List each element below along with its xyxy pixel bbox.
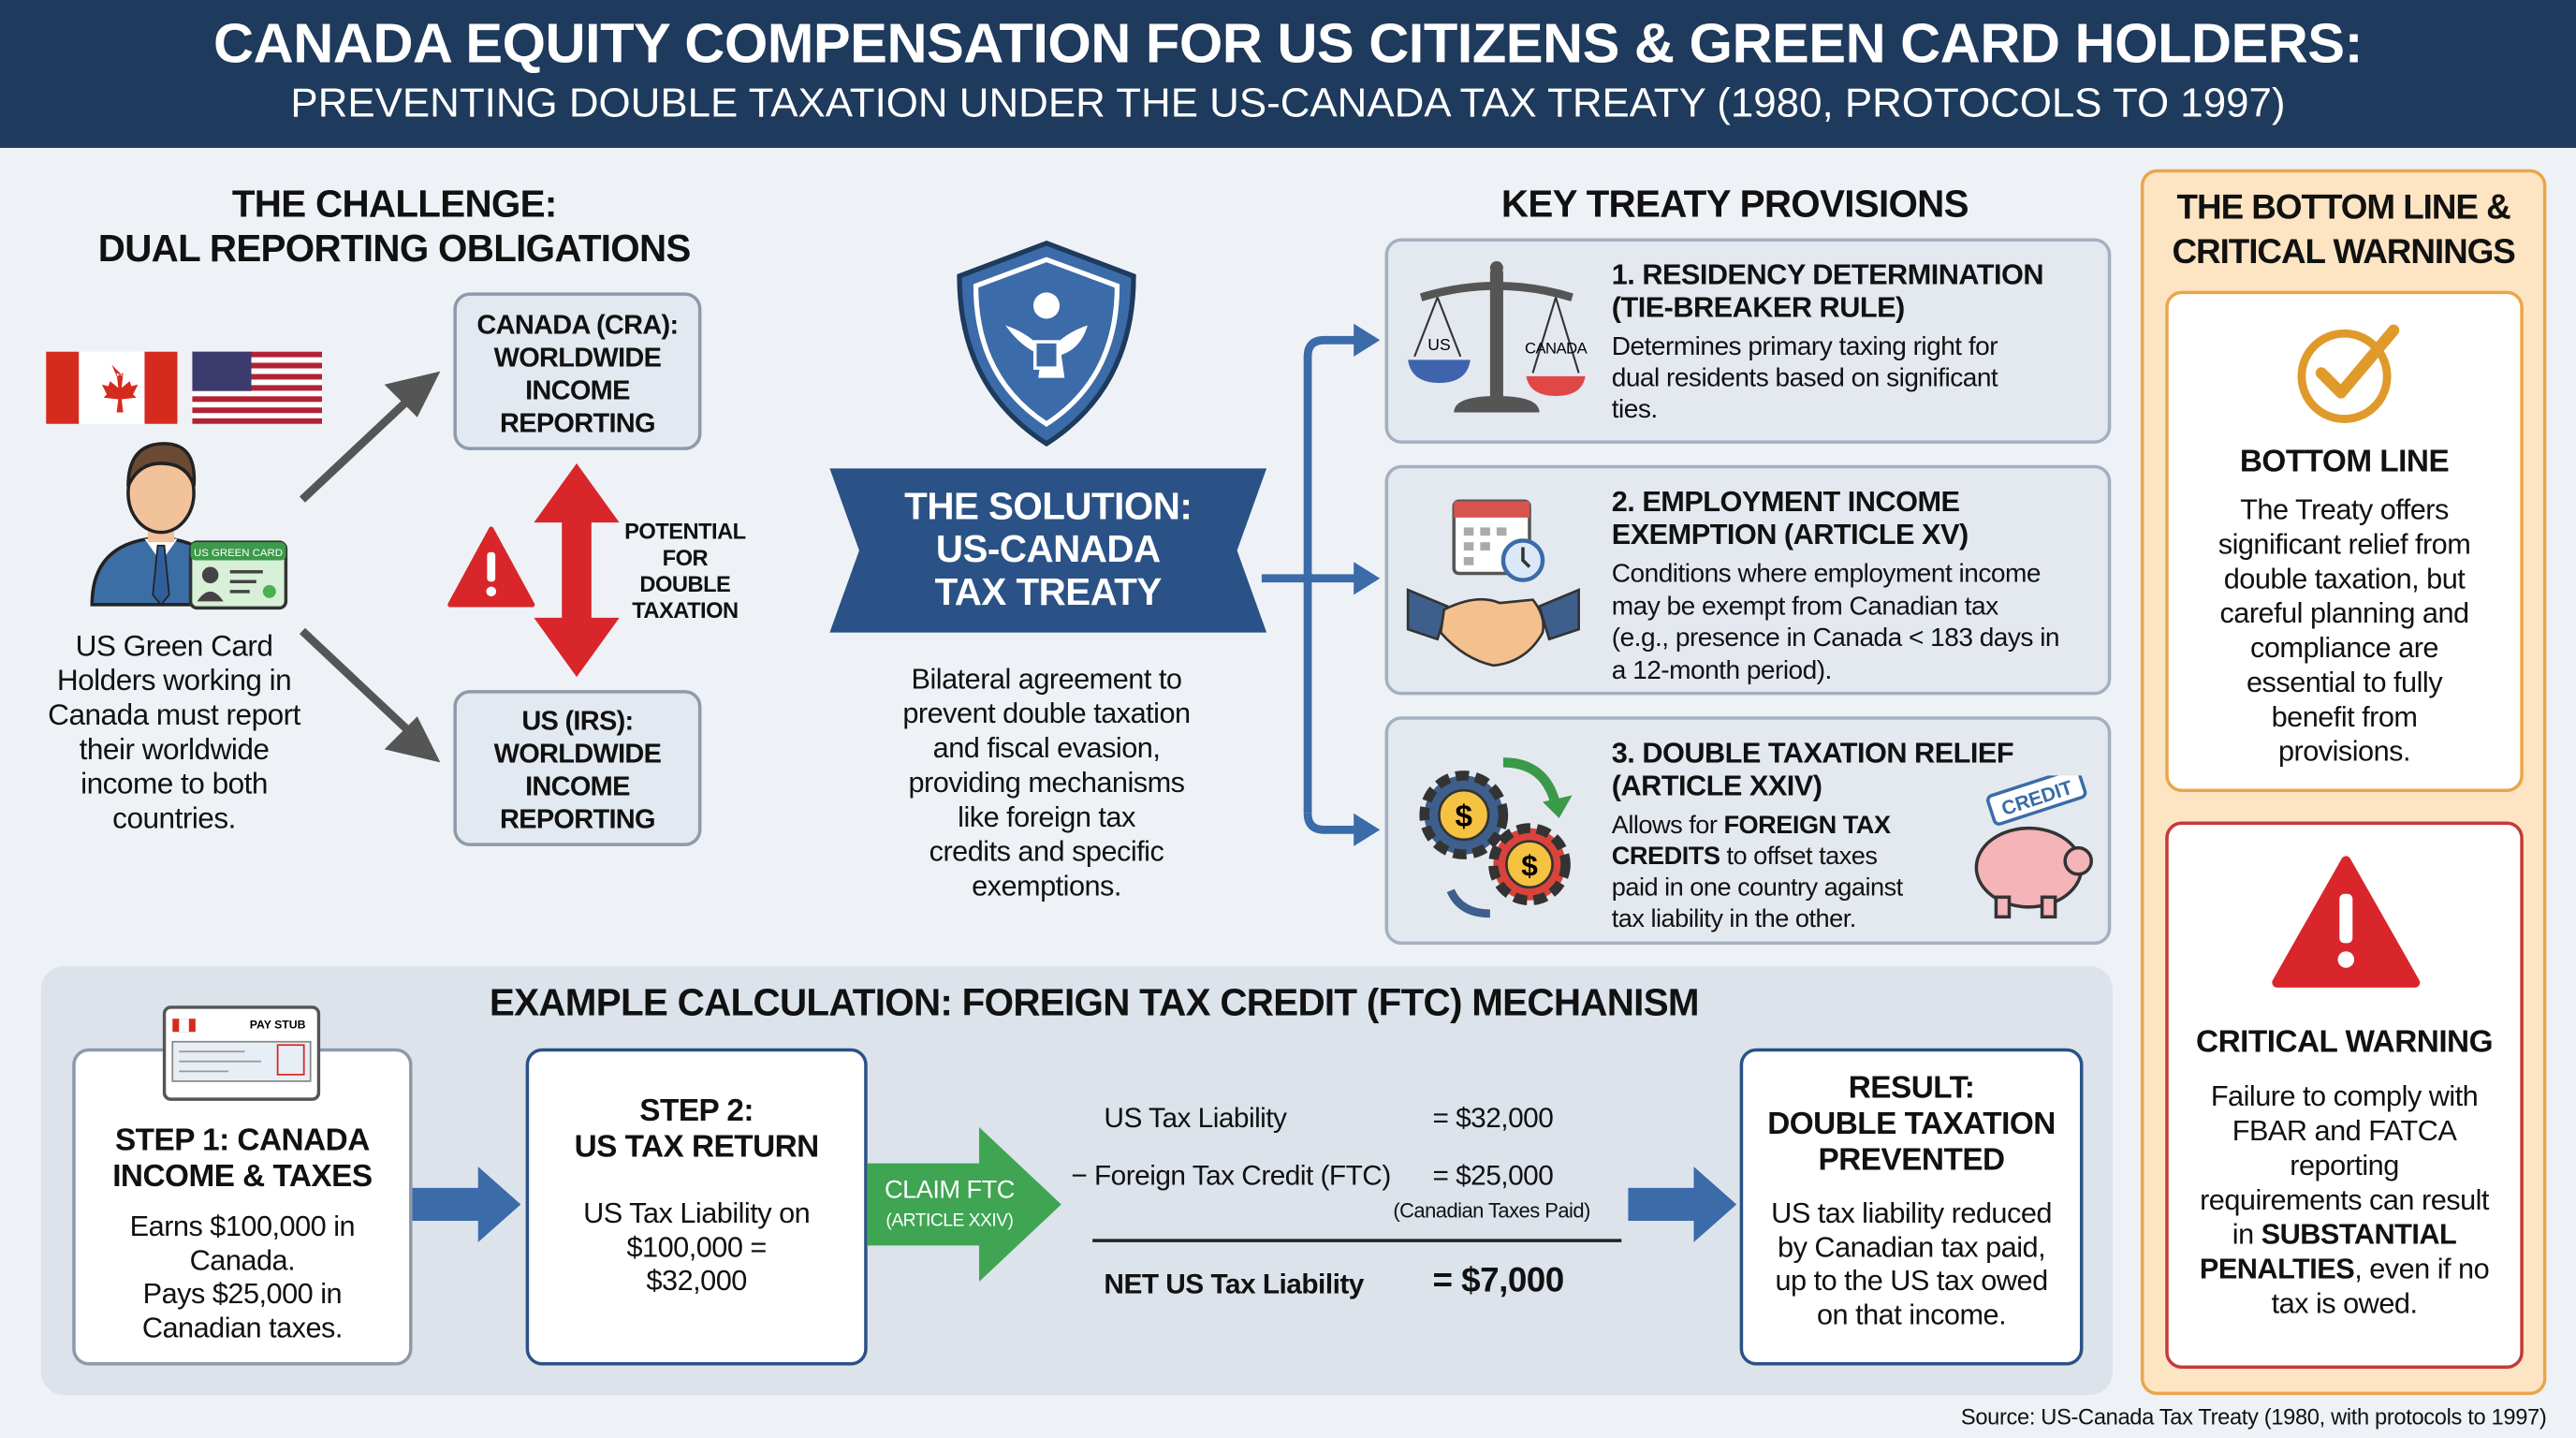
text: potential for double taxation: TAXATION bbox=[632, 598, 739, 623]
box: step 1 bbox=[72, 1049, 413, 1365]
box: step 1: Pays $25,000 in bbox=[143, 1277, 342, 1310]
icon: scales: CANADA bbox=[1525, 339, 1588, 357]
arrow: step1 to step2 bbox=[412, 1167, 520, 1242]
banner: the solution: THE SOLUTION: bbox=[904, 485, 1192, 527]
calculation: NET US Tax Liability bbox=[1104, 1269, 1364, 1299]
text: bottom line: essential to fully bbox=[2247, 666, 2442, 698]
icon: scales bbox=[1408, 261, 1588, 412]
panel: provision 1 bbox=[1385, 238, 2111, 444]
text: bottom line bbox=[2218, 446, 2470, 768]
panel: bottom line and warnings bbox=[2141, 169, 2546, 1395]
heading: bottom line bbox=[2172, 189, 2515, 271]
box: step 2 bbox=[526, 1049, 868, 1365]
text: residency: (TIE-BREAKER RULE) bbox=[1612, 291, 1905, 324]
arrow: claim ftc: (ARTICLE XXIV) bbox=[886, 1211, 1013, 1231]
box: us irs: REPORTING bbox=[500, 805, 655, 835]
icon: handshake calendar bbox=[1406, 500, 1580, 667]
text: residency: dual residents based on significant bbox=[1612, 365, 1998, 392]
box: step 1: Canadian taxes. bbox=[142, 1311, 343, 1343]
text: potential for double taxation: DOUBLE bbox=[639, 572, 730, 596]
subtitle: PREVENTING DOUBLE TAXATION UNDER THE US-CANADA TAX TREATY (1980, PROTOCOLS TO 1997) bbox=[290, 81, 2286, 126]
arrows: connector to provisions bbox=[1262, 324, 1380, 846]
box: canada cra: REPORTING bbox=[500, 409, 655, 439]
text: critical warning: reporting bbox=[2290, 1149, 2399, 1181]
text: bottom line: compliance are bbox=[2250, 631, 2438, 664]
text: bottom line: provisions. bbox=[2278, 735, 2410, 768]
text: solution description: prevent double taxation bbox=[902, 697, 1191, 729]
calculation: = $32,000 bbox=[1432, 1103, 1553, 1134]
icon: gears with dollars bbox=[1419, 757, 1573, 917]
text: green card holders bbox=[48, 629, 301, 835]
icon: gears with dollars: $ bbox=[1521, 848, 1538, 882]
text: green card holders: their worldwide bbox=[80, 733, 269, 766]
calculation: = $7,000 bbox=[1432, 1262, 1564, 1299]
text: solution description bbox=[902, 662, 1191, 902]
heading: the challenge: THE CHALLENGE: bbox=[232, 183, 557, 225]
text: critical warning: Failure to comply with bbox=[2211, 1079, 2478, 1112]
box: result: up to the US tax owed bbox=[1775, 1264, 2048, 1297]
heading: the challenge bbox=[98, 183, 691, 270]
icon: person with green card bbox=[90, 442, 288, 610]
arrow: claim ftc: CLAIM FTC bbox=[885, 1177, 1015, 1204]
icon: pay stub bbox=[163, 1005, 320, 1101]
box: canada cra: INCOME bbox=[525, 376, 630, 406]
text: employment income: a 12-month period). bbox=[1612, 656, 1832, 684]
box: step 2: US Tax Liability on bbox=[583, 1196, 810, 1229]
text: critical warning: CRITICAL WARNING bbox=[2196, 1025, 2493, 1060]
text: bottom line: The Treaty offers bbox=[2240, 493, 2449, 526]
text: employment income: EXEMPTION (ARTICLE XV) bbox=[1612, 518, 1969, 550]
text: residency: Determines primary taxing right for bbox=[1612, 333, 1998, 361]
panel: provision 2 bbox=[1385, 465, 2111, 695]
text: critical warning: PENALTIES, even if no bbox=[2200, 1252, 2489, 1284]
panel: example calculation bbox=[41, 966, 2113, 1395]
box: result: RESULT: bbox=[1849, 1071, 1974, 1106]
box: result bbox=[1740, 1049, 2083, 1365]
box: result: PREVENTED bbox=[1819, 1144, 2005, 1178]
text: solution description: and fiscal evasion, bbox=[933, 731, 1160, 764]
text: green card holders: Holders working in bbox=[57, 664, 291, 697]
text: bottom line: BOTTOM LINE bbox=[2240, 446, 2449, 479]
text: potential for double taxation: FOR bbox=[663, 546, 708, 570]
box: us irs bbox=[453, 690, 701, 846]
icon: person with green card: US GREEN CARD bbox=[194, 548, 283, 559]
icon: pay stub: PAY STUB bbox=[250, 1019, 306, 1032]
arrow: person to us bbox=[300, 627, 440, 762]
panel: provision 3 bbox=[1385, 716, 2111, 945]
text: solution description: credits and specific bbox=[929, 835, 1164, 868]
text: residency: ties. bbox=[1612, 396, 1658, 424]
text: bottom line: benefit from bbox=[2272, 700, 2417, 733]
box: canada cra: WORLDWIDE bbox=[494, 344, 661, 373]
box: us irs: INCOME bbox=[525, 772, 630, 801]
box: result: on that income. bbox=[1817, 1298, 2006, 1330]
text: critical warning: tax is owed. bbox=[2272, 1286, 2417, 1319]
icon: piggy bank credit: CREDIT bbox=[1999, 777, 2075, 820]
text: employment income bbox=[1612, 485, 2059, 684]
text: employment income: 2. EMPLOYMENT INCOME bbox=[1612, 485, 1959, 518]
text: residency bbox=[1612, 258, 2043, 424]
box: canada cra: CANADA (CRA): bbox=[476, 311, 678, 340]
heading: example calculation: EXAMPLE CALCULATION: FOREIGN TAX CREDIT (FTC) MECHANISM bbox=[490, 981, 1699, 1023]
text: double taxation relief: Allows for FOREIGN TAX bbox=[1612, 812, 1891, 840]
box: us irs: US (IRS): bbox=[521, 707, 634, 736]
text: double taxation relief: tax liability in the other. bbox=[1612, 905, 1856, 933]
text: potential for double taxation: POTENTIAL bbox=[624, 520, 746, 544]
box: step 2: STEP 2: bbox=[639, 1094, 754, 1129]
icon: warning triangle bbox=[447, 526, 535, 607]
heading: bottom line: CRITICAL WARNINGS bbox=[2172, 233, 2515, 271]
box: step 2: $32,000 bbox=[646, 1264, 747, 1297]
calculation: US Tax Liability bbox=[1104, 1103, 1286, 1134]
arrow: red double arrow bbox=[534, 463, 620, 677]
box: step 2: $100,000 = bbox=[626, 1230, 767, 1263]
text: potential for double taxation bbox=[624, 520, 746, 623]
text: solution description: like foreign tax bbox=[958, 800, 1135, 833]
banner: the solution: US-CANADA bbox=[936, 527, 1161, 570]
text: critical warning: in SUBSTANTIAL bbox=[2232, 1218, 2456, 1251]
text: green card holders: US Green Card bbox=[76, 629, 272, 662]
text: double taxation relief: paid in one country against bbox=[1612, 874, 1903, 902]
box: bottom line bbox=[2165, 291, 2524, 792]
icon: piggy bank credit bbox=[1975, 775, 2093, 919]
icon: red warning bbox=[2272, 856, 2421, 988]
header banner bbox=[0, 0, 2576, 148]
text: solution description: providing mechanisms bbox=[908, 766, 1185, 799]
banner: the solution: TAX TREATY bbox=[935, 570, 1162, 613]
box: step 1: INCOME & TAXES bbox=[112, 1160, 373, 1195]
icon: canada flag bbox=[46, 352, 178, 424]
box: step 1: STEP 1: CANADA bbox=[115, 1123, 370, 1158]
icon: gears with dollars: $ bbox=[1456, 800, 1473, 834]
text: critical warning: requirements can result bbox=[2200, 1183, 2489, 1216]
heading: key treaty provisions: KEY TREATY PROVISIONS bbox=[1501, 183, 1969, 225]
calculation: − Foreign Tax Credit (FTC) bbox=[1071, 1160, 1391, 1191]
text: solution description: exemptions. bbox=[972, 869, 1121, 902]
text: employment income: Conditions where employment income bbox=[1612, 560, 2041, 588]
text: solution description: Bilateral agreement to bbox=[912, 662, 1181, 695]
text: critical warning bbox=[2196, 1025, 2493, 1319]
text: double taxation relief bbox=[1612, 736, 2013, 933]
icon: us flag bbox=[192, 352, 322, 424]
arrow: calc to result bbox=[1628, 1167, 1736, 1242]
text: bottom line: significant relief from bbox=[2218, 527, 2470, 560]
calculation: = $25,000 bbox=[1432, 1160, 1553, 1191]
text: employment income: may be exempt from Canadian tax bbox=[1612, 593, 1998, 621]
arrow: person to canada bbox=[300, 371, 440, 503]
heading: bottom line: THE BOTTOM LINE & bbox=[2177, 189, 2510, 227]
icon: check circle bbox=[2297, 324, 2400, 423]
icon: shield bbox=[957, 241, 1136, 447]
text: green card holders: Canada must report bbox=[48, 698, 300, 731]
text: bottom line: double taxation, but bbox=[2224, 562, 2465, 594]
text: green card holders: income to both bbox=[80, 768, 268, 800]
text: double taxation relief: 3. DOUBLE TAXATION RELIEF bbox=[1612, 736, 2013, 769]
arrow: claim ftc bbox=[867, 1127, 1061, 1282]
text: double taxation relief: CREDITS to offset taxes bbox=[1612, 843, 1878, 871]
box: result: DOUBLE TAXATION bbox=[1767, 1108, 2056, 1142]
banner: the solution bbox=[829, 468, 1266, 633]
box: step 1: Earns $100,000 in bbox=[130, 1210, 355, 1242]
text: green card holders: countries. bbox=[112, 801, 236, 835]
box: critical warning bbox=[2165, 822, 2524, 1369]
text: critical warning: FBAR and FATCA bbox=[2232, 1114, 2456, 1147]
text: double taxation relief: (ARTICLE XXIV) bbox=[1612, 769, 1822, 801]
box: step 2: US TAX RETURN bbox=[575, 1131, 819, 1165]
title: CANADA EQUITY COMPENSATION FOR US CITIZENS & GREEN CARD HOLDERS: bbox=[213, 13, 2363, 76]
text: bottom line: careful planning and bbox=[2219, 596, 2469, 629]
calculation: (Canadian Taxes Paid) bbox=[1393, 1199, 1590, 1223]
heading: the challenge: DUAL REPORTING OBLIGATIONS bbox=[98, 227, 691, 270]
text: residency: 1. RESIDENCY DETERMINATION bbox=[1612, 258, 2043, 291]
box: result: US tax liability reduced bbox=[1771, 1196, 2052, 1229]
calculation bbox=[1071, 1103, 1621, 1299]
box: step 1: Canada. bbox=[190, 1243, 295, 1276]
source note: Source: US-Canada Tax Treaty (1980, with protocols to 1997) bbox=[1961, 1405, 2546, 1430]
icon: scales: US bbox=[1427, 335, 1451, 354]
text: employment income: (e.g., presence in Canada < 183 days in bbox=[1612, 624, 2059, 653]
box: result: by Canadian tax paid, bbox=[1778, 1230, 2045, 1263]
box: canada cra bbox=[453, 292, 701, 450]
box: us irs: WORLDWIDE bbox=[494, 740, 661, 769]
